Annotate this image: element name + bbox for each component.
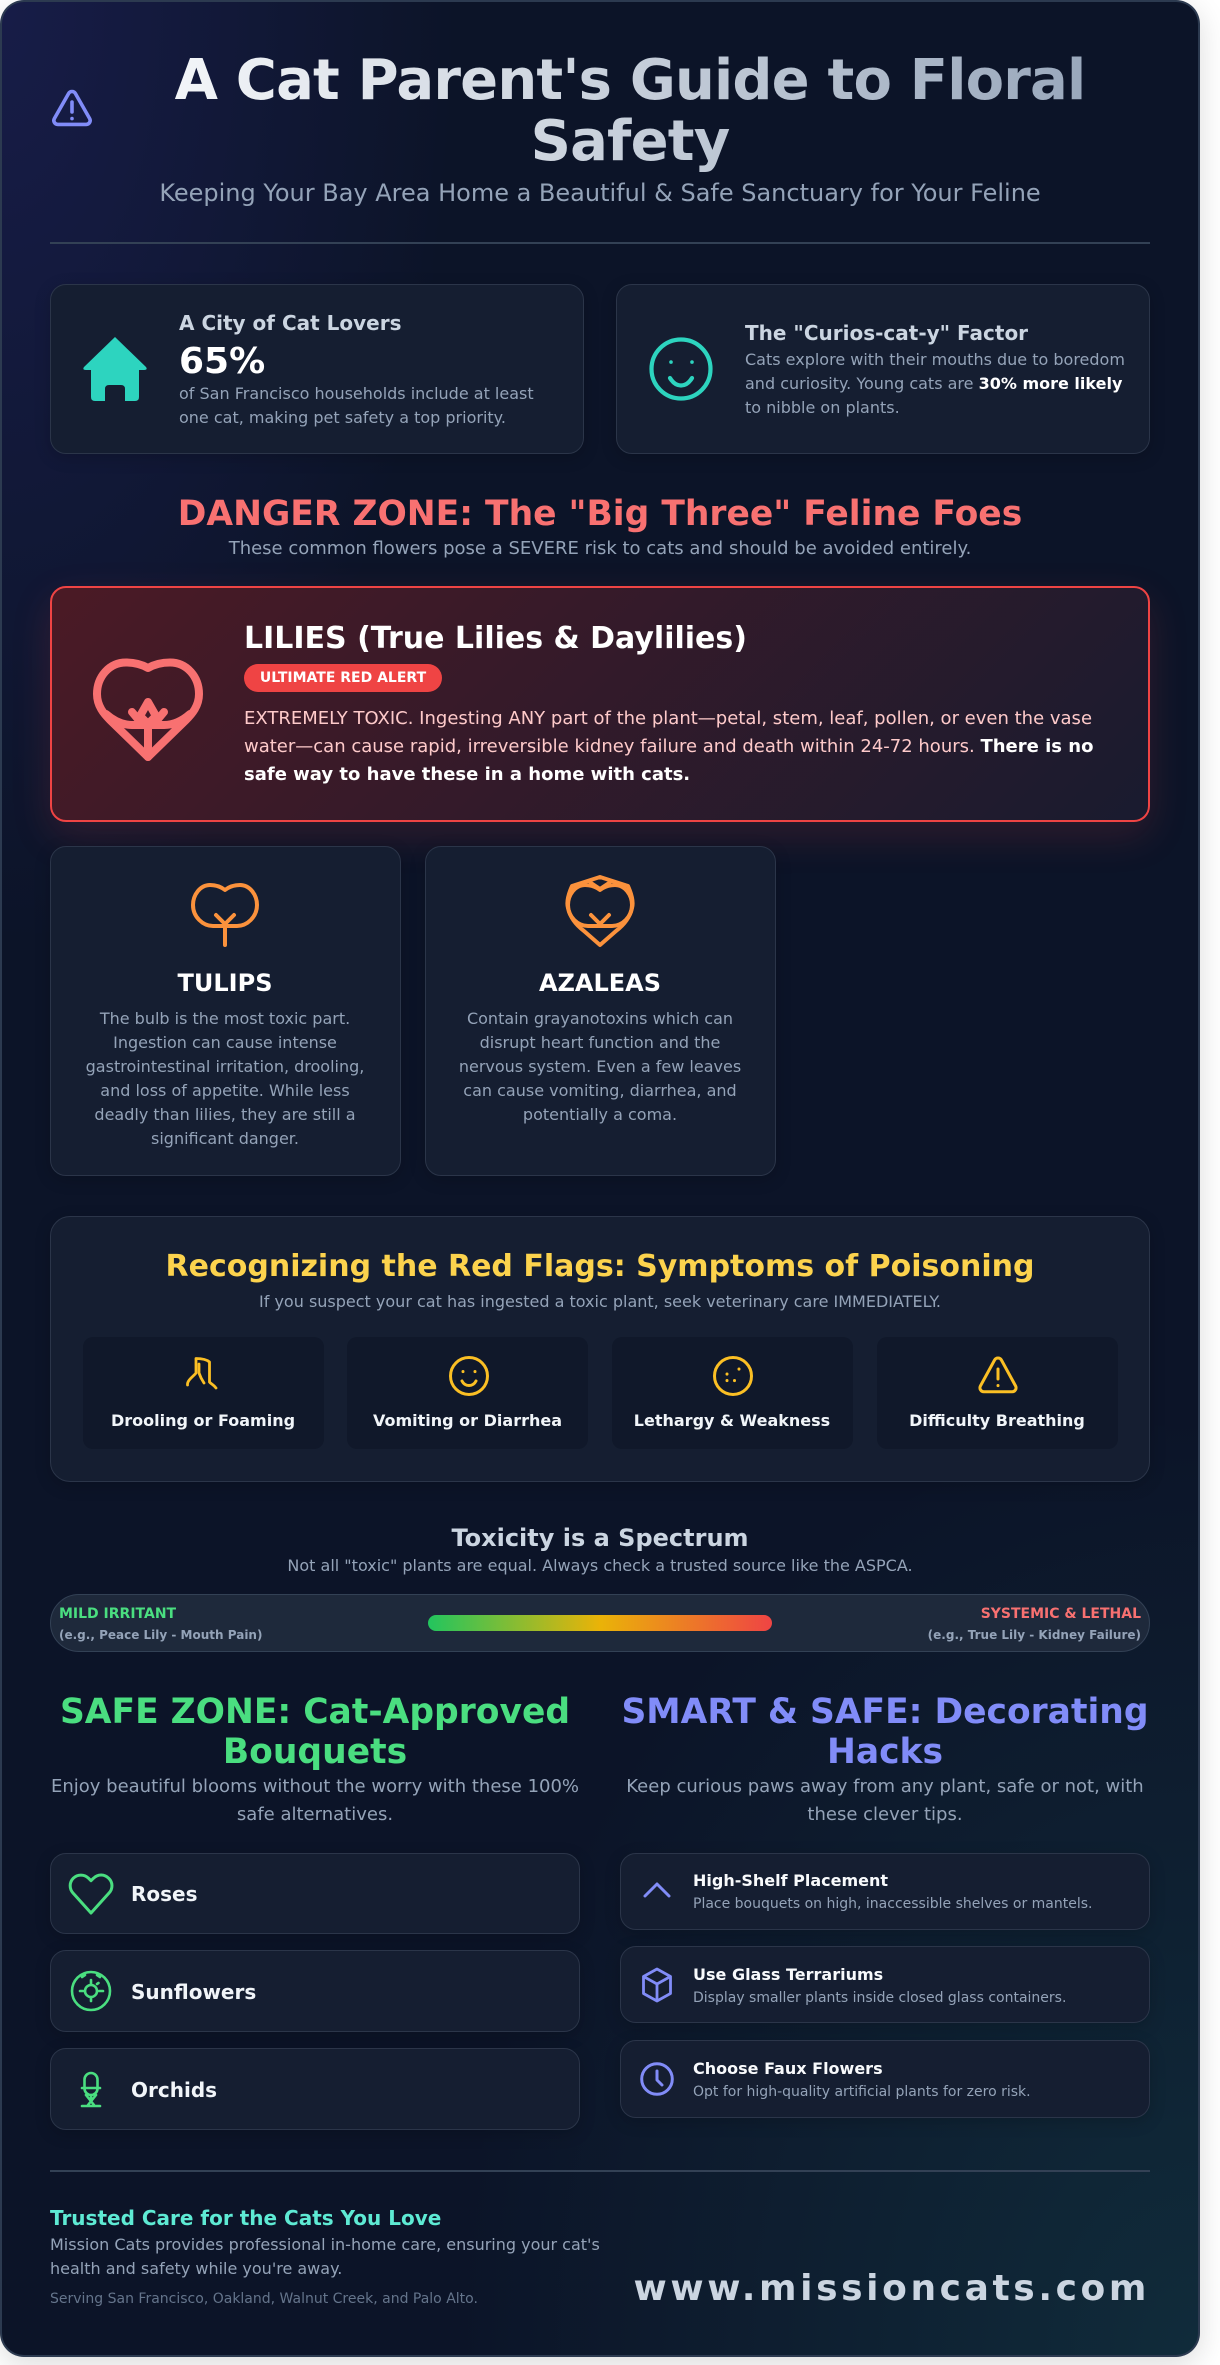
- label: peace lily: (e.g., Peace Lily - Mouth Pain): [59, 1628, 262, 1642]
- icon: smile: [649, 337, 713, 401]
- text: tulips: Ingestion can cause intense: [113, 1032, 337, 1052]
- text: mission cats: health and safety while you're away.: [50, 2259, 342, 2278]
- label: true lily: (e.g., True Lily - Kidney Failure): [928, 1628, 1141, 1642]
- icon: clock: [640, 2062, 674, 2096]
- panel: sunflowers: [50, 1950, 580, 2032]
- heading: symptoms: Recognizing the Red Flags: Symptoms of Poisoning: [166, 1249, 1034, 1284]
- icon: orchid: [80, 2072, 102, 2108]
- heading: tulips: TULIPS: [178, 968, 272, 996]
- text: smart subhead: [626, 1776, 1144, 1825]
- label: mild irritant: MILD IRRITANT: [59, 1606, 176, 1622]
- heading: city of cat lovers: A City of Cat Lovers: [179, 311, 402, 335]
- label: lethargy: Lethargy & Weakness: [634, 1410, 830, 1430]
- heading: smart and safe: [621, 1692, 1149, 1772]
- icon: cube: [642, 1968, 672, 2002]
- text: azaleas: can cause vomiting, diarrhea, and: [463, 1080, 737, 1100]
- label: roses: Roses: [131, 1882, 198, 1906]
- stat: 65%: 65%: [179, 340, 265, 382]
- heading: curios-cat-y: The "Curios-cat-y" Factor: [745, 321, 1028, 345]
- text: tulips: [86, 1008, 364, 1148]
- panel: glass terrariums: [620, 1946, 1150, 2023]
- text: tulips: deadly than lilies, they are still a: [94, 1104, 356, 1124]
- label: sunflowers: Sunflowers: [131, 1980, 256, 2004]
- heading: safe zone: [60, 1692, 570, 1772]
- icon: drool: [186, 1357, 218, 1390]
- title: A Cat Parent's Guide to Floral Safety: [175, 48, 1085, 174]
- text: curios-cat-y: Cats explore with their mouths due to boredom: [745, 350, 1125, 368]
- panel: lilies: [50, 586, 1150, 822]
- text: high shelf: Place bouquets on high, inaccessible shelves or mantels.: [693, 1896, 1092, 1912]
- text: glass terrariums: Display smaller plants inside closed glass containers.: [693, 1990, 1066, 2006]
- panel: tulips: [50, 846, 401, 1176]
- symptom box: breathing: [877, 1337, 1118, 1449]
- text: smart subhead: these clever tips.: [807, 1804, 963, 1825]
- text: curios-cat-y: [745, 350, 1125, 416]
- icon: lily: [93, 658, 203, 761]
- text: lilies: safe way to have these in a home with cats.: [244, 764, 690, 784]
- text: serving: Serving San Francisco, Oakland, Walnut Creek, and Palo Alto.: [50, 2291, 478, 2307]
- text: lilies: water—can cause rapid, irreversible kidney failure and death within 24-72 hours. There is no: [244, 736, 1093, 756]
- text: spectrum subhead: Not all "toxic" plants are equal. Always check a trusted source like the ASPCA.: [287, 1556, 913, 1575]
- text: azaleas: nervous system. Even a few leaves: [459, 1056, 741, 1076]
- panel: high shelf: [620, 1853, 1150, 1930]
- panel: curios-cat-y factor: [616, 284, 1150, 454]
- heading: high shelf: High-Shelf Placement: [693, 1871, 888, 1890]
- heading: faux flowers: Choose Faux Flowers: [693, 2059, 883, 2078]
- badge: ultimate red alert: ULTIMATE RED ALERT: [260, 670, 426, 686]
- text: azaleas: [459, 1008, 741, 1124]
- icon: lethargy face: [713, 1356, 753, 1396]
- heading: safe zone: SAFE ZONE: Cat-Approved: [60, 1692, 570, 1732]
- panel: faux flowers: [620, 2040, 1150, 2118]
- text: azaleas: potentially a coma.: [523, 1104, 677, 1124]
- text: safe subhead: Enjoy beautiful blooms without the worry with these 100%: [51, 1776, 579, 1797]
- text: safe subhead: [51, 1776, 579, 1825]
- label: breathing: Difficulty Breathing: [909, 1410, 1085, 1430]
- heading: danger zone: DANGER ZONE: The "Big Three" Feline Foes: [178, 494, 1022, 534]
- gradient bar: [428, 1615, 772, 1631]
- website url: www.missioncats.com: [634, 2268, 1150, 2309]
- panel: orchids: [50, 2048, 580, 2130]
- symptom box: vomiting: [347, 1337, 588, 1449]
- text: tulips: gastrointestinal irritation, drooling,: [86, 1056, 364, 1076]
- text: azaleas: disrupt heart function and the: [480, 1032, 720, 1052]
- icon: house: [83, 337, 147, 401]
- text: symptoms subhead: If you suspect your cat has ingested a toxic plant, seek veterinary care IMMEDIATELY.: [259, 1292, 941, 1310]
- label: drooling: Drooling or Foaming: [111, 1410, 295, 1430]
- text: lilies: EXTREMELY TOXIC. Ingesting ANY part of the plant—petal, stem, leaf, pollen, or even the vase: [244, 708, 1092, 728]
- text: mission cats: [50, 2235, 600, 2278]
- text: households: of San Francisco households include at least: [179, 384, 534, 402]
- heading: smart and safe: Hacks: [827, 1732, 943, 1772]
- heading: trusted care: Trusted Care for the Cats You Love: [50, 2206, 441, 2230]
- label: vomiting: Vomiting or Diarrhea: [373, 1410, 562, 1430]
- heading: spectrum: Toxicity is a Spectrum: [451, 1524, 749, 1552]
- text: smart subhead: Keep curious paws away from any plant, safe or not, with: [626, 1776, 1144, 1797]
- symptom box: drooling: [83, 1337, 324, 1449]
- heading: smart and safe: SMART & SAFE: Decorating: [621, 1692, 1149, 1732]
- text: azaleas: Contain grayanotoxins which can: [467, 1008, 733, 1028]
- text: lilies: [244, 708, 1093, 784]
- subtitle: Keeping Your Bay Area Home a Beautiful & Safe Sanctuary for Your Feline: [159, 179, 1041, 207]
- label: orchids: Orchids: [131, 2078, 217, 2102]
- text: safe subhead: safe alternatives.: [237, 1804, 393, 1825]
- icon: sunflower: [70, 1970, 112, 2012]
- label: systemic lethal: SYSTEMIC & LETHAL: [981, 1606, 1141, 1622]
- text: danger subhead: These common flowers pose a SEVERE risk to cats and should be avoided entirely.: [229, 538, 971, 558]
- icon: azalea: [565, 875, 635, 948]
- panel: roses: [50, 1853, 580, 1934]
- heading: azaleas: AZALEAS: [539, 968, 661, 996]
- text: households: one cat, making pet safety a top priority.: [179, 408, 506, 426]
- icon: header warning triangle: [52, 90, 92, 126]
- panel: spectrum bar: [50, 1594, 1150, 1652]
- heading: safe zone: Bouquets: [223, 1732, 407, 1772]
- text: mission cats: Mission Cats provides professional in-home care, ensuring your cat's: [50, 2235, 600, 2254]
- panel: city of cat lovers: [50, 284, 584, 454]
- icon: heart: [68, 1874, 114, 1915]
- badge: ultimate red alert: [244, 664, 442, 692]
- text: households: [179, 384, 534, 426]
- panel: azaleas: [425, 846, 776, 1176]
- symptom box: lethargy: [612, 1337, 853, 1449]
- icon: tulip: [191, 883, 259, 947]
- icon: breathing triangle: [978, 1356, 1018, 1394]
- heading: lilies: LILIES (True Lilies & Daylilies): [244, 621, 747, 656]
- text: curios-cat-y: and curiosity. Young cats are 30% more likely: [745, 374, 1122, 392]
- panel: symptoms: [50, 1216, 1150, 1482]
- icon: vomit face: [449, 1356, 489, 1396]
- text: tulips: and loss of appetite. While less: [100, 1080, 350, 1100]
- text: tulips: significant danger.: [151, 1128, 299, 1148]
- text: faux flowers: Opt for high-quality artificial plants for zero risk.: [693, 2084, 1031, 2100]
- text: tulips: The bulb is the most toxic part.: [100, 1008, 350, 1028]
- heading: glass terrariums: Use Glass Terrariums: [693, 1965, 883, 1984]
- icon: chevron up: [643, 1882, 671, 1898]
- text: curios-cat-y: to nibble on plants.: [745, 398, 900, 416]
